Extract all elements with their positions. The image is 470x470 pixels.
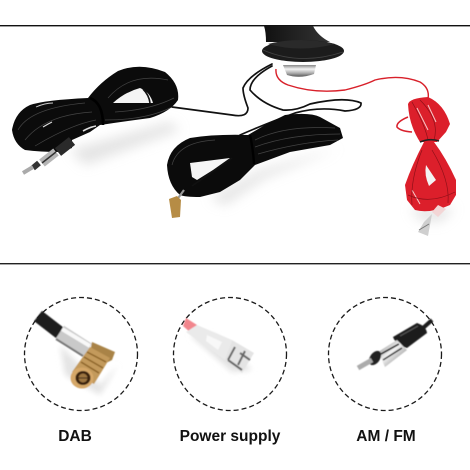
black coil left (12, 67, 178, 152)
bottom divider line (0, 263, 470, 264)
dashed circle (328, 298, 442, 410)
coil highlights (18, 78, 174, 146)
top divider line (0, 25, 470, 26)
red coil (397, 97, 456, 211)
detail: DAB (24, 298, 138, 445)
label: Power supply (180, 428, 281, 445)
icon: AM/FM plug (358, 320, 432, 368)
small AM/FM plug on left coil (23, 141, 72, 173)
detail: AM / FM (328, 298, 442, 445)
detail: Power supply (174, 298, 286, 445)
soft shadows under the coils (70, 122, 455, 222)
small power terminal (418, 205, 446, 236)
red lead wire (276, 69, 428, 99)
dashed circle (24, 298, 138, 410)
small DAB connector (169, 190, 184, 218)
label: DAB (58, 428, 92, 445)
hole in coil (190, 158, 230, 180)
black connecting cables (172, 64, 361, 135)
tie (90, 98, 103, 125)
label: AM / FM (356, 428, 416, 445)
antenna base (262, 26, 344, 77)
hole in coil (113, 88, 153, 103)
dashed circle (174, 298, 286, 410)
black coil centre (167, 114, 343, 197)
icon: power terminal (183, 318, 254, 373)
product photo: antenna with cables (12, 26, 456, 236)
icon: DAB gold connector (38, 316, 118, 395)
